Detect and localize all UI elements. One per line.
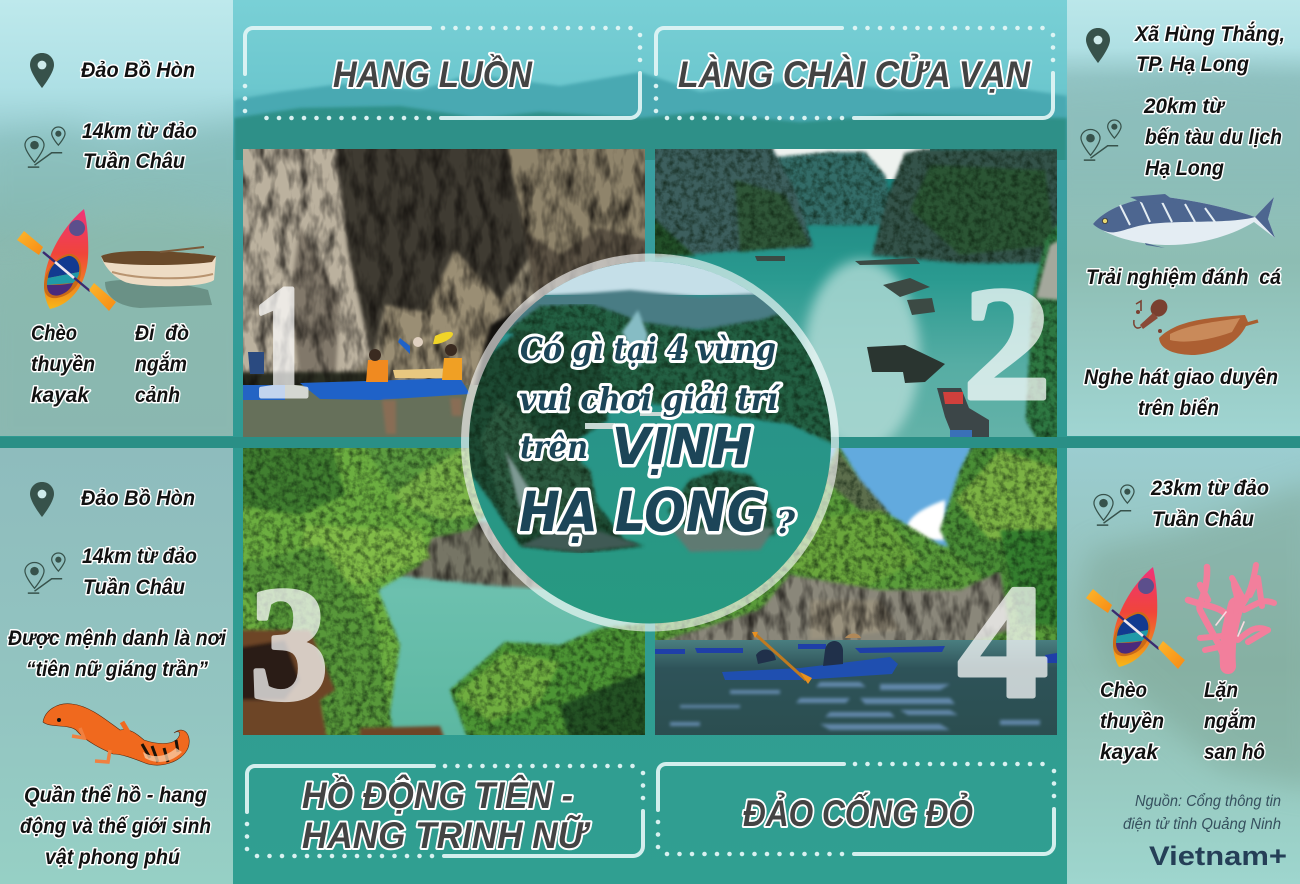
fairy legend text: “tiên nữ giáng trần”: [26, 658, 208, 681]
icon: route: [25, 127, 65, 167]
distance text: [82, 120, 197, 173]
activity: coral diving: [1204, 679, 1265, 764]
activity: coral diving: Lặn: [1204, 679, 1238, 702]
distance text: Hạ Long: [1145, 157, 1224, 180]
activity: coral diving: san hô: [1204, 741, 1265, 764]
location label: Đảo Bồ Hòn: [81, 487, 195, 510]
icon: location pin: [1086, 28, 1110, 63]
logo: Vietnam+: Vietnam+: [1149, 841, 1287, 871]
distance text: [1150, 477, 1269, 531]
info: Hồ Động Tiên: [8, 482, 227, 869]
icon: route: [1081, 120, 1121, 160]
activity: kayaking: Chèo: [31, 322, 77, 345]
headline: center title: [519, 330, 795, 544]
section header: Hồ Động Tiên - Hang Trinh Nữ: HANG TRINH NỮ: [302, 814, 591, 856]
headline: center title: trên: [520, 428, 588, 466]
location label: TP. Hạ Long: [1136, 53, 1249, 76]
section header: Đảo Cống Đỏ: [658, 764, 1054, 854]
activity: kayaking: [1100, 679, 1164, 764]
number 4: 4: [958, 553, 1048, 732]
location label: [1134, 23, 1285, 76]
icon: location pin: [30, 482, 54, 517]
location label: Xã Hùng Thắng,: [1134, 23, 1285, 46]
panel: top-left info background: [0, 0, 233, 436]
photo 1: Hang Luồn cave: [235, 140, 665, 437]
activity: kayaking: kayak: [31, 384, 90, 407]
section header: Hồ Động Tiên - Hang Trinh Nữ: HỒ ĐỘNG TIÊN -: [302, 774, 573, 816]
info: Đảo Cống Đỏ: [1086, 477, 1287, 871]
serenade text: [1084, 366, 1278, 420]
activity: kayaking: Chèo: [1100, 679, 1147, 702]
icon: singing boat: [1159, 315, 1258, 355]
activity: kayaking: [31, 322, 95, 407]
fishing activity text: Trải nghiệm đánh cá: [1086, 266, 1281, 289]
distance text: 23km từ đảo: [1150, 477, 1269, 500]
section header: Làng chài Cửa Vạn: [656, 28, 1053, 118]
photo 3: Hồ Động Tiên lagoon: [243, 448, 645, 735]
headline: center title: VỊNH: [612, 418, 752, 477]
serenade text: Nghe hát giao duyên: [1084, 366, 1278, 389]
headline: center title: HẠ LONG: [519, 480, 767, 544]
icon: route: [25, 553, 65, 593]
icon: route: [1094, 485, 1134, 525]
background: bay landscape: [0, 0, 1300, 448]
distance text: bến tàu du lịch: [1145, 126, 1282, 149]
icon: pink coral: [1188, 565, 1274, 666]
activity: kayaking: thuyền: [1100, 710, 1164, 733]
distance text: Tuần Châu: [83, 576, 185, 599]
icon: wooden boat: [101, 247, 216, 308]
icon: gecko: [43, 704, 189, 765]
distance text: Tuần Châu: [1152, 508, 1254, 531]
distance text: [82, 545, 197, 599]
biodiversity text: [20, 784, 211, 869]
source note: [1123, 793, 1281, 833]
headline: center title: vui chơi giải trí: [519, 380, 781, 418]
photo 4: Cống Đỏ island kayaks: [650, 440, 1065, 735]
distance text: Tuần Châu: [83, 150, 185, 173]
icon: kayak: [1086, 567, 1185, 669]
distance text: [1143, 95, 1282, 180]
biodiversity text: vật phong phú: [45, 846, 180, 869]
distance text: 14km từ đảo: [82, 120, 197, 143]
activity: boat sightseeing: cảnh: [135, 384, 180, 407]
center circle: [450, 253, 842, 633]
activity: boat sightseeing: [135, 322, 189, 407]
source note: điện tử tỉnh Quảng Ninh: [1123, 816, 1281, 833]
activity: boat sightseeing: Đi đò: [135, 322, 189, 345]
location label: Đảo Bồ Hòn: [81, 59, 195, 82]
section header: Hồ Động Tiên - Hang Trinh Nữ: [247, 766, 643, 856]
photo 2: Cửa Vạn fishing village: [655, 149, 1057, 437]
panel: bottom-left info background: [0, 448, 233, 884]
section header: Đảo Cống Đỏ: ĐẢO CỐNG ĐỎ: [743, 792, 973, 834]
headline: center title: ?: [776, 503, 795, 541]
section header: Hang Luồn: [245, 28, 640, 118]
activity: kayaking: thuyền: [31, 353, 95, 376]
number 3: 3: [250, 555, 328, 734]
panel: top-right info background: [1067, 0, 1300, 436]
activity: boat sightseeing: ngắm: [135, 353, 187, 376]
distance text: 20km từ: [1143, 95, 1226, 118]
fairy legend text: [8, 627, 227, 681]
panel: bottom-right info background: [1067, 448, 1300, 884]
info: Hang Luồn: [17, 53, 216, 407]
fairy legend text: Được mệnh danh là nơi: [8, 627, 227, 650]
activity: coral diving: ngắm: [1204, 710, 1256, 733]
distance text: 14km từ đảo: [82, 545, 197, 568]
icon: location pin: [30, 53, 54, 88]
biodiversity text: Quần thể hồ - hang: [24, 784, 207, 807]
info: Làng chài Cửa Vạn: [1081, 23, 1285, 420]
headline: center title: Có gì tại 4 vùng: [520, 330, 776, 368]
activity: kayaking: kayak: [1100, 741, 1159, 764]
source note: Nguồn: Cổng thông tin: [1135, 793, 1281, 810]
number 2: 2: [963, 255, 1051, 434]
icon: microphone: [1134, 296, 1171, 333]
icon: mackerel fish: [1093, 194, 1275, 248]
section header: Làng chài Cửa Vạn: LÀNG CHÀI CỬA VẠN: [678, 53, 1031, 95]
icon: kayak: [17, 209, 116, 311]
number 1: 1: [251, 253, 313, 432]
biodiversity text: động và thế giới sinh: [20, 815, 211, 838]
section header: Hang Luồn: HANG LUỒN: [333, 53, 533, 95]
serenade text: trên biển: [1138, 397, 1219, 420]
